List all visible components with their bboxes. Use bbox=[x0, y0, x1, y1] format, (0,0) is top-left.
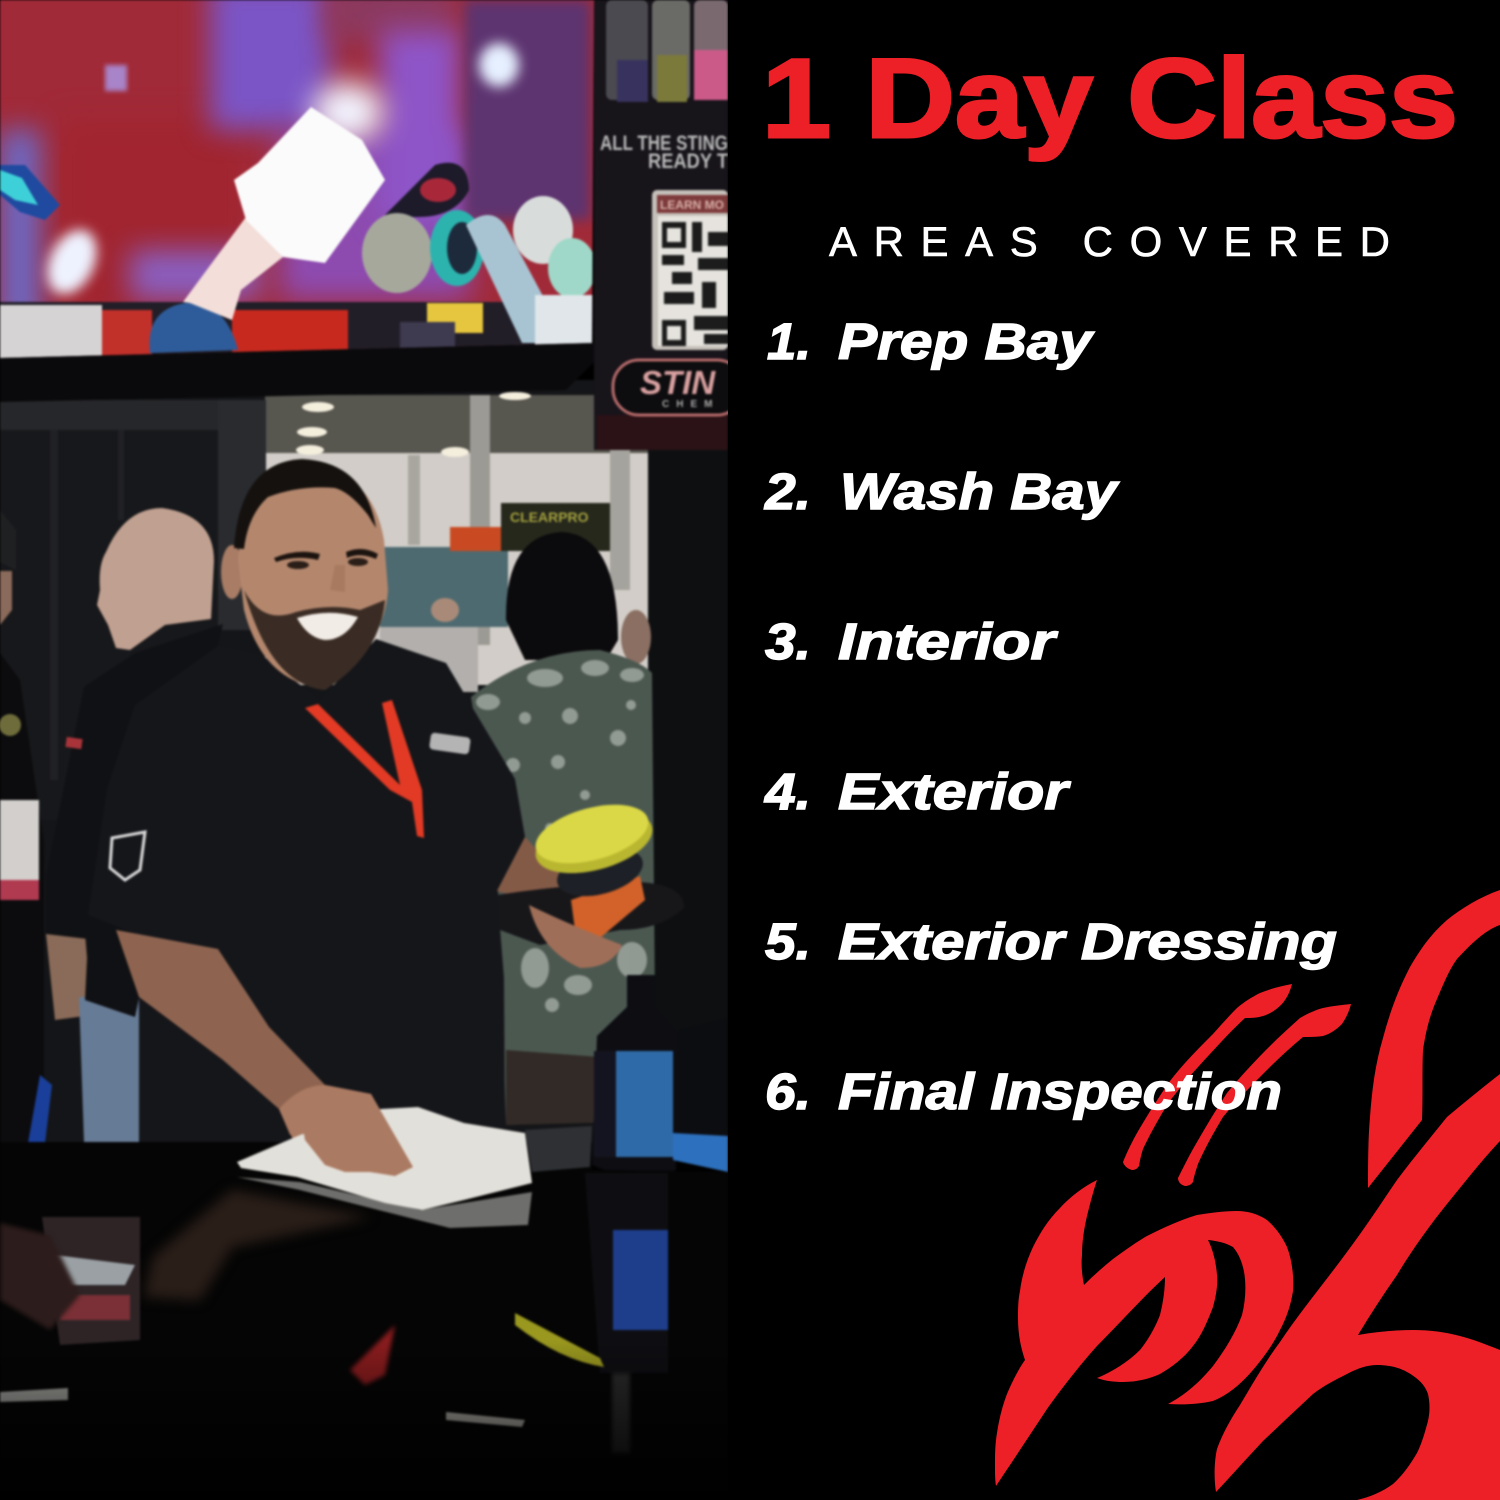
photo: man hair bbox=[234, 459, 376, 549]
photo: bald man in background bbox=[46, 508, 223, 1142]
photo: person at left edge bbox=[0, 510, 52, 1143]
list of areas bbox=[764, 313, 1337, 1120]
photo: man ear bbox=[221, 545, 243, 599]
photo: red lanyard bbox=[305, 700, 424, 838]
item 3: 3. bbox=[765, 613, 811, 670]
item 1: Prep Bay bbox=[838, 313, 1095, 370]
photo: expo hall background: CLEARPRO bbox=[510, 509, 589, 525]
photo: fingers on towel bbox=[302, 1108, 414, 1178]
photo: TV screen bbox=[0, 0, 596, 362]
item 5: 5. bbox=[765, 913, 811, 970]
item 3: Interior bbox=[838, 613, 1059, 670]
photo: man arm left bbox=[116, 930, 340, 1135]
photo: shirt patch bbox=[429, 732, 471, 755]
photo: TV bezel bbox=[0, 343, 594, 402]
photo: QR card bbox=[652, 190, 728, 350]
photo: man polishing car at trade show bbox=[0, 0, 743, 1500]
photo: man hand on towel bbox=[278, 1084, 324, 1140]
photo: bottom fade bbox=[0, 1340, 728, 1500]
photo: man beard bbox=[244, 590, 385, 690]
photo: man arm right bbox=[496, 836, 560, 894]
item 2: 2. bbox=[764, 463, 811, 520]
photo: sleeve logo bbox=[110, 832, 145, 880]
photo: blue bottle on screen bbox=[0, 165, 60, 220]
photo: gray pad bbox=[525, 1126, 592, 1172]
photo: product banner bbox=[594, 0, 743, 450]
photo: man torso in black shirt bbox=[264, 638, 526, 1072]
logo: red claw mark bbox=[995, 890, 1500, 1500]
photo: hand with towel on screen bbox=[183, 217, 283, 320]
photo: dark booth background bbox=[40, 380, 594, 1142]
photo: banner logo pill bbox=[597, 360, 743, 450]
item 4: Exterior bbox=[838, 763, 1072, 820]
photo: hood reflection bbox=[0, 1173, 668, 1453]
logo: thin whisker right bbox=[1178, 1004, 1351, 1186]
photo: polisher bbox=[497, 794, 684, 968]
photo: QR card: LEARN MO bbox=[660, 198, 724, 212]
photo: dark pillar right bbox=[646, 449, 652, 672]
photo: smiling man bbox=[106, 457, 560, 1140]
item 2: Wash Bay bbox=[840, 463, 1120, 520]
photo: bottle and pads on screen bbox=[385, 163, 469, 217]
logo: main swoosh bbox=[1215, 1074, 1500, 1500]
photo: man eyebrows and eyes bbox=[274, 549, 378, 592]
item 6: Final Inspection bbox=[838, 1063, 1282, 1120]
item 6: 6. bbox=[765, 1063, 811, 1120]
photo: expo hall background bbox=[265, 392, 650, 692]
photo: paisley pattern bbox=[476, 660, 647, 1012]
item 1: 1. bbox=[767, 313, 811, 370]
item 4: 4. bbox=[764, 763, 811, 820]
logo: thin whisker left bbox=[1123, 984, 1292, 1170]
photo: bottle bbox=[592, 975, 680, 1176]
photo: banner bottles bbox=[606, 0, 728, 102]
subtitle: areas covered: AREAS COVERED bbox=[829, 218, 1390, 265]
logo: right flame bbox=[1368, 890, 1500, 1188]
photo: strip of products along TV bottom bbox=[0, 300, 536, 356]
item 2 bbox=[764, 463, 1120, 520]
photo: man head bbox=[238, 465, 388, 688]
item 5: Exterior Dressing bbox=[838, 913, 1337, 970]
logo: left letter form bbox=[995, 1180, 1293, 1486]
title: 1 Day Class bbox=[762, 36, 1458, 161]
photo: blue pad on the table bbox=[671, 1132, 728, 1174]
photo: white towel bbox=[237, 1107, 532, 1210]
photo: product banner: ALL THE STING bbox=[600, 132, 728, 155]
photo: banner logo pill: STIN bbox=[640, 364, 716, 401]
item 3 bbox=[765, 613, 1059, 670]
photo: glossy black car hood bbox=[0, 1140, 658, 1172]
photo: woman with paisley shirt bbox=[471, 532, 655, 1125]
item 4 bbox=[764, 763, 1072, 820]
item 1 bbox=[767, 313, 1095, 370]
photo: dark curtain left bbox=[0, 400, 266, 820]
photo: banner logo pill: CHEM bbox=[662, 399, 719, 410]
photo: towel reflection bbox=[237, 1177, 532, 1228]
photo: product banner: READY T bbox=[648, 150, 728, 173]
